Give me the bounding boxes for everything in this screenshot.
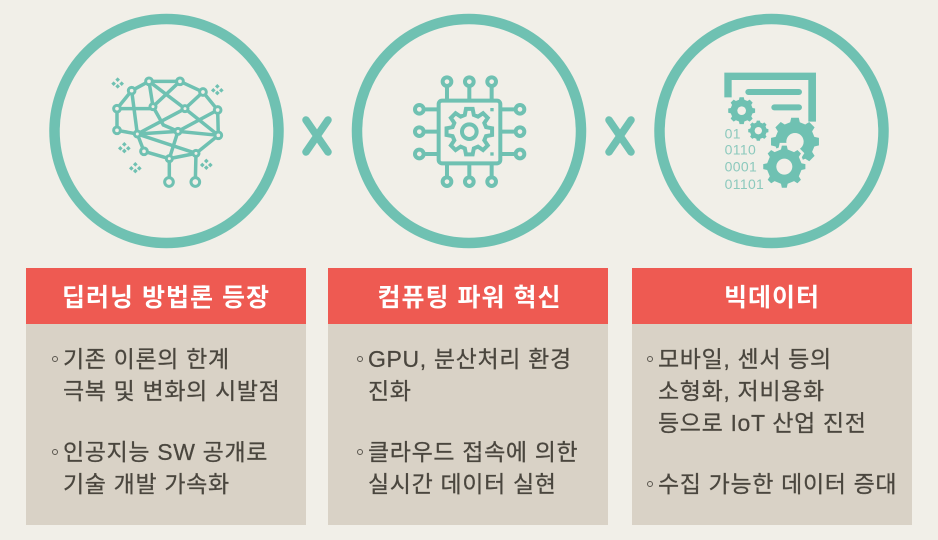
heading: computing power (328, 268, 608, 324)
bullet text 2 (52, 439, 268, 497)
icon: big data document and gears: 01101 (725, 176, 764, 192)
panel: big data (632, 268, 912, 525)
bullet text 1: GPU, 분산처리 환경 (368, 346, 572, 372)
circle: data (660, 19, 884, 243)
bullet text 1: 등으로 IoT 산업 진전 (658, 410, 867, 436)
circle: brain (54, 19, 278, 243)
icons and multiply signs (49, 14, 889, 248)
icon: big data document and gears (724, 73, 819, 192)
bullet text 1 (357, 346, 572, 404)
bullet text 1: 소형화, 저비용화 (658, 378, 825, 404)
bullet text 2: 클라우드 접속에 의한 (368, 439, 578, 465)
icon: chip with gear (415, 77, 524, 186)
heading: deep learning (26, 268, 306, 324)
heading: big data: 빅데이터 (724, 284, 820, 312)
bullet text 1: 진화 (368, 378, 412, 404)
panel: computing power (328, 268, 608, 525)
multiply sign 2 (609, 120, 631, 152)
heading: big data (632, 268, 912, 324)
bullet text 1: 극복 및 변화의 시발점 (63, 378, 280, 404)
bullet text 1: 모바일, 센서 등의 (658, 346, 832, 372)
panel: deep learning (26, 268, 306, 525)
multiply sign 1 (306, 120, 328, 152)
bullet text 1: 기존 이론의 한계 (63, 346, 230, 372)
bullet text 2: 실시간 데이터 실현 (368, 471, 557, 497)
bullet text 2: 인공지능 SW 공개로 (63, 439, 268, 465)
heading: deep learning: 딥러닝 방법론 등장 (62, 284, 270, 312)
bullet text 2: 수집 가능한 데이터 증대 (658, 471, 897, 497)
icon: big data document and gears: 0110 (725, 141, 756, 157)
icon: neural network brain (111, 77, 224, 186)
heading: computing power: 컴퓨팅 파워 혁신 (378, 284, 561, 312)
bullet text 1 (52, 346, 280, 404)
icon: big data document and gears: 0001 (725, 159, 757, 175)
bullet text 1 (647, 346, 867, 436)
bullet text 2 (357, 439, 578, 497)
icon: big data document and gears: 01 (725, 125, 741, 141)
circle: chip (357, 19, 581, 243)
bullet text 2: 기술 개발 가속화 (63, 471, 230, 497)
